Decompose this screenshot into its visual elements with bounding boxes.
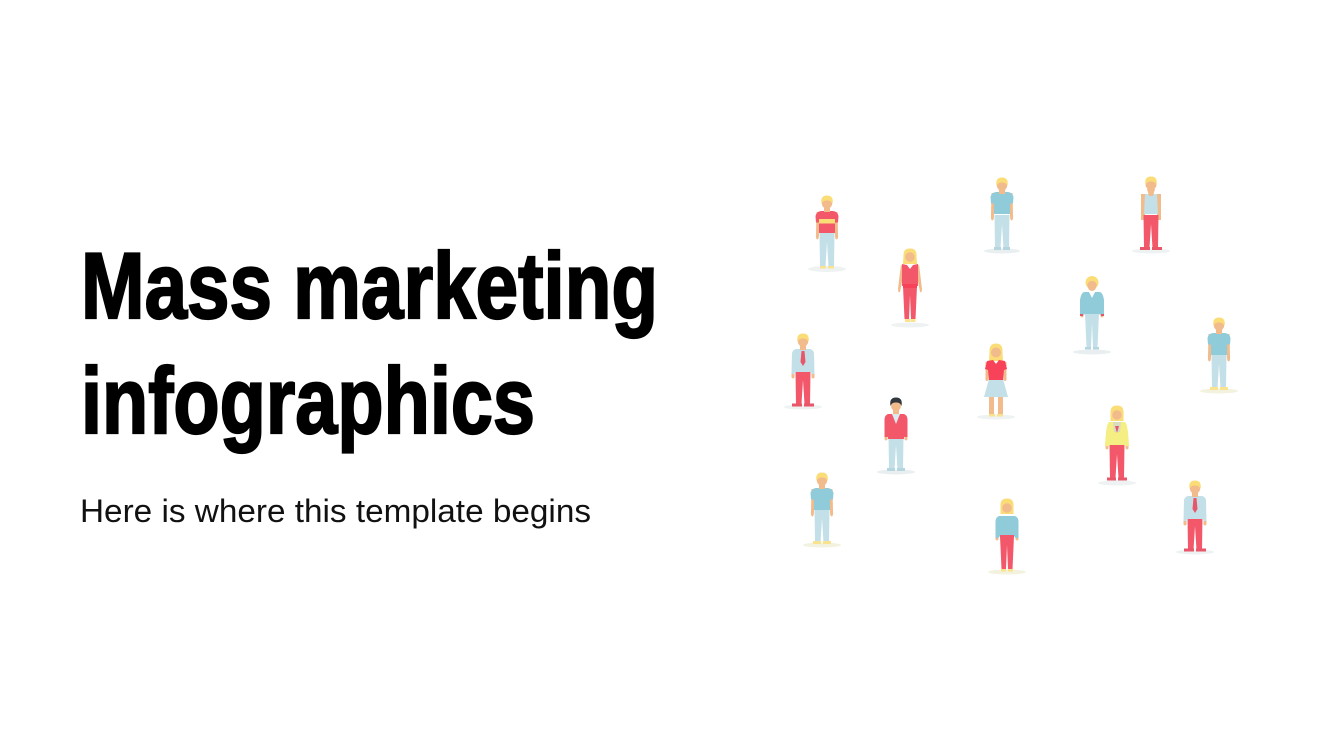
illustration: crowd of people [784,176,1238,574]
person: man in light tank top and red pants [1132,176,1170,254]
title: Mass marketing [81,233,658,338]
title [81,233,658,453]
person: man with tie, left [784,334,822,410]
person: woman in yellow top [1098,406,1136,486]
subtitle: Here is where this template begins [80,493,591,529]
person: man in blue tee, lower left [803,472,841,548]
person: man in blue polo [984,178,1020,254]
person: dark-haired man in red cardigan [877,398,915,474]
title: infographics [81,348,535,453]
person: man in striped red shirt [808,196,846,272]
person: woman in blue sweater [1073,276,1111,354]
person: woman in blue sweater and red pants [988,498,1026,574]
person: man with tie, right [1176,480,1214,554]
person: woman in red top and skirt [977,344,1015,420]
person: woman in red [891,248,929,328]
person: man in blue tee with yellow shoes [1200,318,1238,394]
